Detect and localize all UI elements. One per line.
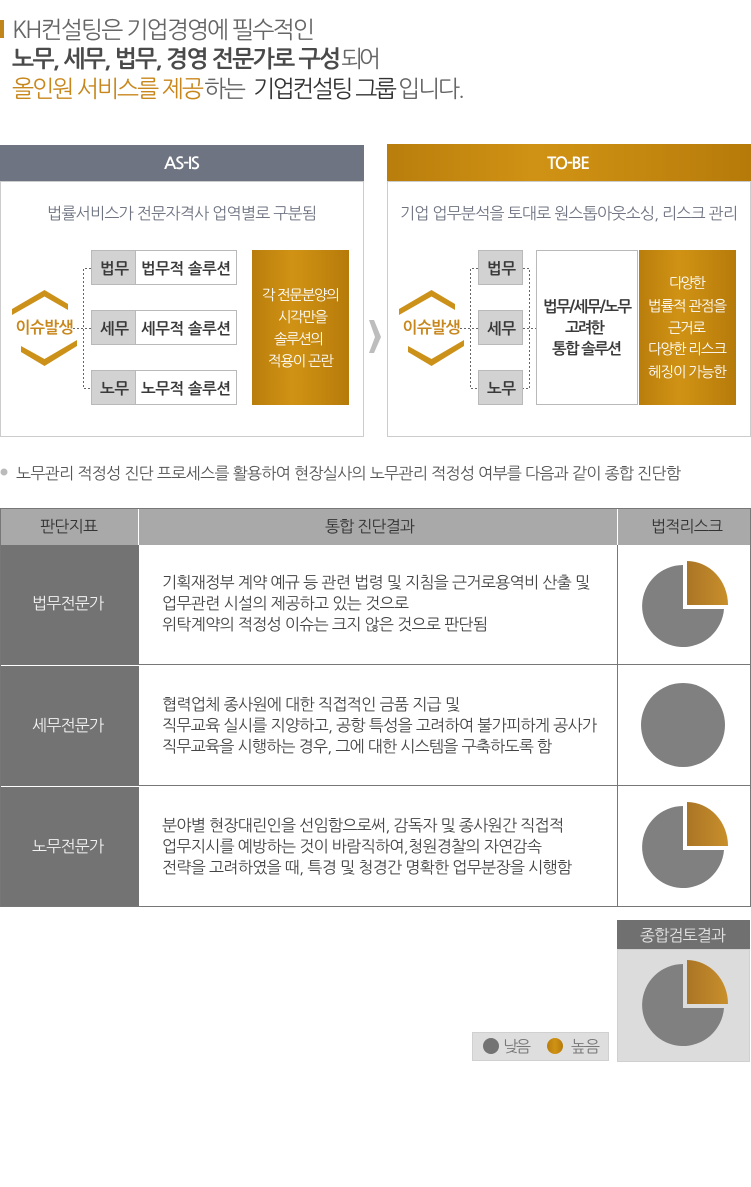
box: 노무: 노무 <box>487 381 516 397</box>
arrow: AS-IS to TO-BE <box>369 320 381 353</box>
title: 입니다. <box>398 77 465 101</box>
row: 법무전문가 <box>32 561 728 647</box>
callout: AS-IS problem: 솔루션의 <box>274 331 324 347</box>
row: 세무전문가: 직무교육을 시행하는 경우, 그에 대한 시스템을 구축하도록 함 <box>162 738 552 755</box>
table header: 판단지표 <box>40 518 98 535</box>
title: 하는 <box>204 77 246 101</box>
title: KH컨설팅은 기업경영에 필수적인 <box>12 18 315 42</box>
legend: 낮음 <box>503 1038 531 1055</box>
pie chart: 법무 <box>642 561 728 647</box>
TO-BE header <box>387 144 751 181</box>
row: 노무: 노무 <box>100 381 129 397</box>
box: integrated solution: 통합 솔루션 <box>552 340 622 357</box>
connector lines <box>73 268 91 388</box>
box: 세무 <box>478 310 522 344</box>
row: 법무: 법무 <box>100 260 129 277</box>
pie chart: 노무 <box>642 802 728 888</box>
callout: AS-IS problem <box>252 250 349 405</box>
pie chart: overall <box>642 960 728 1046</box>
table: diagnosis <box>0 508 751 906</box>
pie chart: 세무 <box>641 683 725 767</box>
title <box>0 18 465 101</box>
callout: AS-IS problem: 시각만을 <box>278 309 328 325</box>
legend: 높음 <box>571 1038 600 1055</box>
row: 법무전문가: 법무전문가 <box>32 595 104 612</box>
callout: TO-BE benefit: 다양한 <box>669 275 706 291</box>
row: 법무 <box>92 250 236 284</box>
callout: TO-BE benefit: 근거로 <box>668 321 706 336</box>
row: 노무전문가: 업무지시를 예방하는 것이 바람직하여,청원경찰의 자연감속 <box>162 838 542 855</box>
title: 노무, 세무, 법무, 경영 전문가로 구성 <box>12 47 341 71</box>
callout: AS-IS problem: 적용이 곤란 <box>268 354 334 369</box>
row: 법무: 법무적 솔루션 <box>141 260 231 277</box>
row: 세무: 세무적 솔루션 <box>141 320 231 337</box>
title: 되어 <box>341 47 381 71</box>
callout: AS-IS problem: 각 전문분양의 <box>262 287 340 303</box>
row: 노무 <box>92 370 236 404</box>
row: 노무전문가 <box>32 802 728 888</box>
box: 세무: 세무 <box>487 320 516 337</box>
table header <box>0 508 751 545</box>
row: 법무전문가: 기획재정부 계약 예규 등 관련 법령 및 지침을 근거로용역비 산출 및 <box>162 574 590 591</box>
bullet text: 노무관리 적정성 진단 프로세스를 활용하여 현장실사의 노무관리 적정성 여부를 다음과 같이 종합 진단함 <box>16 465 681 482</box>
row: 노무: 노무적 솔루션 <box>141 380 231 397</box>
icon: issue hexagon <box>399 290 464 366</box>
overall result heading <box>617 920 750 949</box>
callout: TO-BE benefit: 헤징이 가능한 <box>648 365 727 380</box>
callout: TO-BE benefit: 다양한 리스크 <box>648 341 727 357</box>
panel: overall result <box>617 920 750 1062</box>
table rows <box>0 545 139 906</box>
row: 세무전문가: 세무전문가 <box>32 717 104 734</box>
overall result heading: 종합검토결과 <box>640 927 726 944</box>
callout: TO-BE benefit <box>639 250 736 405</box>
box: 법무: 법무 <box>487 260 516 277</box>
table header: 통합 진단결과 <box>325 518 415 535</box>
TO-BE subtitle: 기업 업무분석을 토대로 원스톱아웃소싱, 리스크 관리 <box>400 205 738 222</box>
table header: 법적리스크 <box>651 518 723 535</box>
legend <box>472 1032 608 1060</box>
icon: issue hexagon: 이슈발생 <box>16 319 74 336</box>
panel: AS-IS <box>0 145 364 436</box>
row: 세무전문가: 직무교육 실시를 지양하고, 공항 특성을 고려하여 불가피하게 공사가 <box>162 717 597 734</box>
AS-IS header <box>0 145 364 181</box>
title: 올인원 서비스를 제공 <box>12 77 204 101</box>
row: 세무: 세무 <box>100 320 129 337</box>
TO-BE header: TO-BE <box>547 155 590 172</box>
row: 세무 <box>92 310 236 344</box>
panel: TO-BE <box>387 144 751 436</box>
icon: issue hexagon <box>12 290 77 366</box>
box: integrated solution: 고려한 <box>565 319 605 336</box>
box: integrated solution: 법무/세무/노무 <box>543 298 632 315</box>
box: integrated solution <box>536 250 638 404</box>
row: 법무전문가: 위탁계약의 적정성 이슈는 크지 않은 것으로 판단됨 <box>162 616 488 633</box>
row: 노무전문가: 노무전문가 <box>32 838 104 855</box>
callout: TO-BE benefit: 법률적 관점을 <box>648 298 727 314</box>
row: 세무전문가 <box>32 683 725 767</box>
box: 노무 <box>478 370 522 404</box>
connector lines <box>460 268 536 388</box>
row: 세무전문가: 협력업체 종사원에 대한 직접적인 금품 지급 및 <box>162 696 460 713</box>
row: 노무전문가: 전략을 고려하였을 때, 특경 및 청경간 명확한 업무분장을 시행함 <box>162 859 572 876</box>
title: 기업컨설팅 그룹 <box>253 77 397 101</box>
row: 노무전문가: 분야별 현장대린인을 선임함으로써, 감독자 및 종사원간 직접적 <box>162 817 564 834</box>
icon: issue hexagon: 이슈발생 <box>402 319 460 336</box>
AS-IS header: AS-IS <box>164 155 200 172</box>
AS-IS subtitle: 법률서비스가 전문자격사 업역별로 구분됨 <box>47 205 317 222</box>
box: 법무 <box>478 250 522 284</box>
row: 법무전문가: 업무관련 시설의 제공하고 있는 것으로 <box>162 595 409 612</box>
